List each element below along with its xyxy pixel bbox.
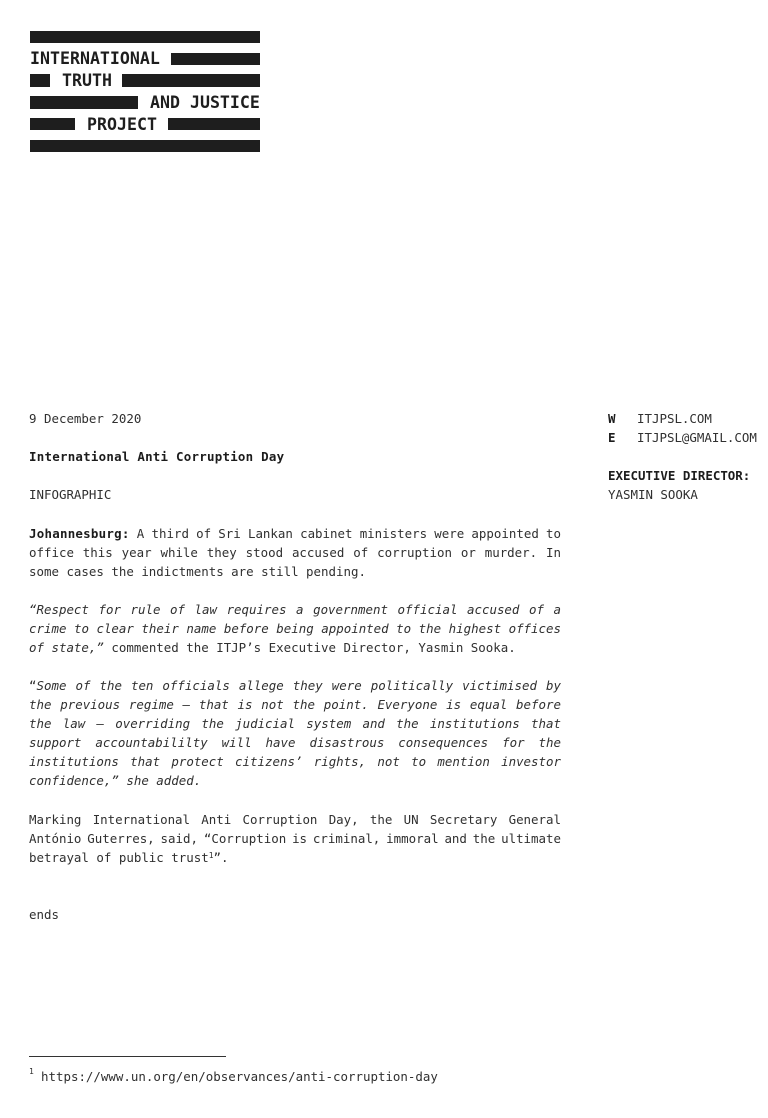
closing: ends: ends: [29, 907, 59, 922]
paragraph: officials quote: confidence,” she added.: [29, 773, 201, 788]
contact details: ITJPSL@GMAIL.COM: [637, 430, 757, 445]
logo: International Truth and Justice Project: PROJECT: [87, 115, 157, 134]
footnote rule: [29, 1056, 226, 1057]
heading: International Anti Corruption Day: [29, 449, 284, 464]
paragraph: Johannesburg: some cases the indictments are still pending.: [29, 564, 366, 579]
label: infographic: INFOGRAPHIC: [29, 487, 111, 502]
paragraph: Sooka quote: of state,” commented the ITJP’s Executive Director, Yasmin Sooka.: [29, 640, 516, 655]
paragraph: Sooka quote: crime to clear their name before being appointed to the highest offices: [29, 621, 561, 636]
paragraph: officials quote: [29, 678, 561, 788]
paragraph: UN Secretary General: [29, 812, 561, 865]
paragraph: Johannesburg: office this year while they stood accused of corruption or murder. In: [29, 545, 561, 560]
paragraph: Johannesburg: [29, 526, 561, 579]
footnote: https://www.un.org/en/observances/anti-corruption-day: [41, 1069, 438, 1084]
paragraph: UN Secretary General: Marking International Anti Corruption Day, the UN Secretary General: [29, 812, 561, 827]
paragraph: Johannesburg: Johannesburg: A third of Sri Lankan cabinet ministers were appointed to: [29, 526, 561, 541]
paragraph: officials quote: support accountabililty will have disastrous consequences for the: [29, 735, 561, 750]
executive director: EXECUTIVE DIRECTOR:: [608, 468, 750, 483]
paragraph: officials quote: the previous regime – that is not the point. Everyone is equal before: [29, 697, 561, 712]
logo: International Truth and Justice Project: INTERNATIONAL: [30, 49, 160, 68]
contact details: [608, 411, 757, 445]
footnote: 1: [29, 1067, 34, 1076]
logo: International Truth and Justice Project: TRUTH: [62, 71, 112, 90]
executive director: YASMIN SOOKA: [608, 487, 698, 502]
paragraph: officials quote: institutions that protect citizens’ rights, not to mention investor: [29, 754, 561, 769]
contact details: W: [608, 411, 616, 426]
executive director: [608, 468, 750, 502]
contact details: ITJPSL.COM: [637, 411, 712, 426]
logo: International Truth and Justice Project: AND JUSTICE: [150, 93, 260, 112]
paragraph: UN Secretary General: betrayal of public trust1”.: [29, 850, 229, 865]
paragraph: officials quote: the law – overriding the judicial system and the institutions that: [29, 716, 561, 731]
logo: International Truth and Justice Project: [30, 31, 260, 152]
contact details: E: [608, 430, 616, 445]
date: 9 December 2020: [29, 411, 141, 426]
paragraph: Sooka quote: [29, 602, 561, 655]
paragraph: UN Secretary General: António Guterres, said, “Corruption is criminal, immoral and the ultimate: [29, 831, 561, 846]
paragraph: officials quote: “Some of the ten officials allege they were politically victimised by: [29, 678, 561, 693]
paragraph: Sooka quote: “Respect for rule of law requires a government official accused of a: [29, 602, 561, 617]
